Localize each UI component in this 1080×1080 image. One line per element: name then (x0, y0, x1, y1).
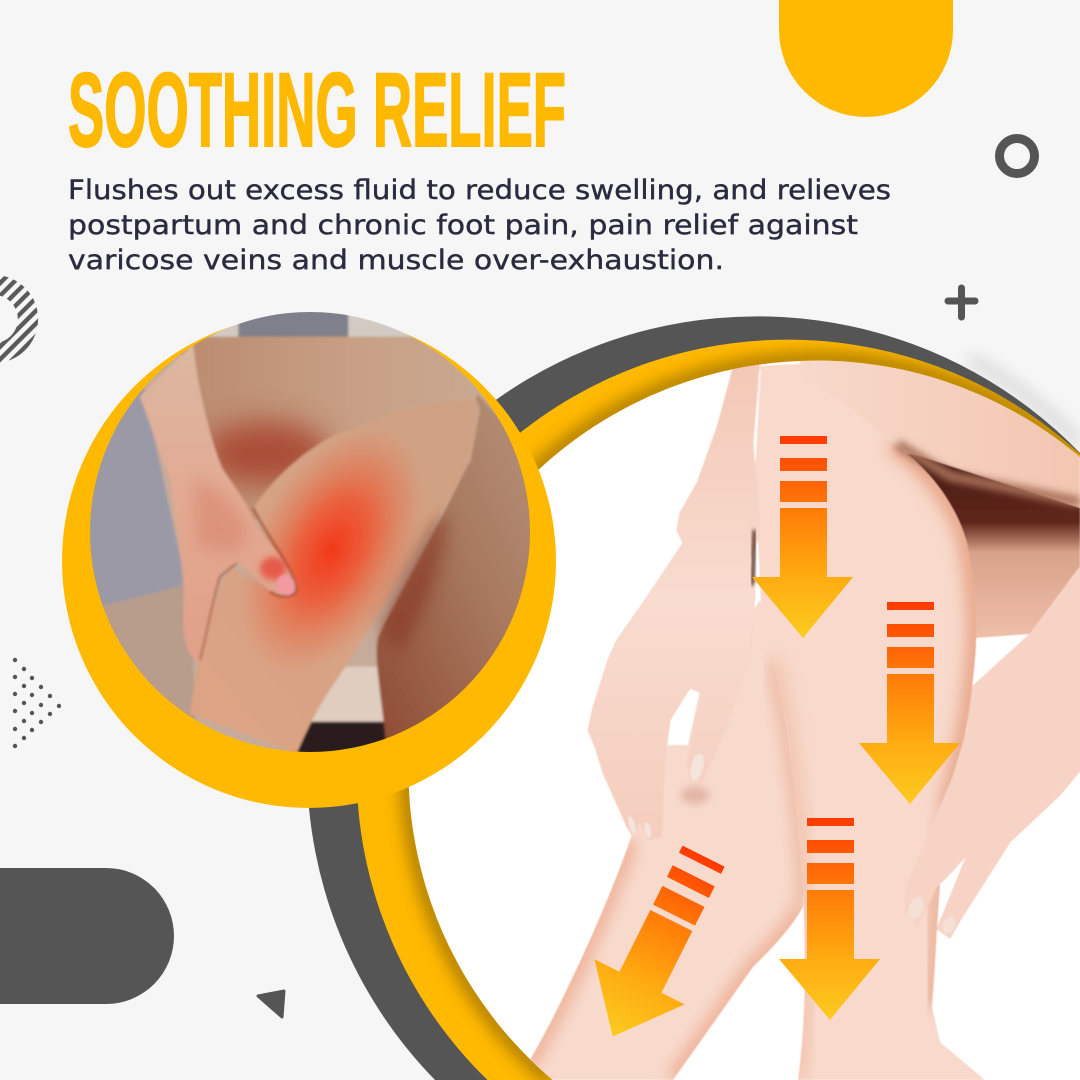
decoration: dot triangle (13, 658, 61, 748)
upper thigh (177, 337, 480, 520)
front calf (190, 398, 477, 753)
legs photo (527, 350, 1080, 1080)
main leg edge shading (773, 443, 976, 1080)
decoration: small triangle (258, 991, 284, 1017)
panel: calf pain photo circle (60, 293, 560, 808)
dark shade beside calf (380, 517, 447, 653)
black stool (294, 720, 388, 752)
arrow 4 (567, 833, 748, 1059)
thumb contour (253, 508, 297, 596)
gray towel (90, 388, 184, 607)
thumb nail (276, 573, 296, 597)
main leg (755, 360, 985, 1080)
back leg edge shading (527, 660, 803, 1080)
yellow backing circle (62, 314, 556, 808)
soft shadow beside ring (969, 358, 1080, 444)
decoration: gray pill (0, 868, 174, 1004)
decoration: gray ring (1000, 138, 1034, 174)
decoration: yellow top tab (779, 0, 953, 117)
back thigh with dark underside (900, 452, 1080, 638)
yellow ring inner shading (408, 361, 1080, 1080)
description text: Flushes out excess fluid to reduce swelling, and relieves (68, 175, 891, 206)
back leg (527, 600, 803, 1080)
description text: varicose veins and muscle over-exhaustion. (68, 245, 724, 276)
arrow 3 (779, 818, 880, 1020)
description text (68, 175, 891, 276)
hand lower edge shading (200, 563, 237, 660)
decoration: striped ring (0, 275, 38, 363)
yellow ring (357, 340, 1080, 1080)
description text: postpartum and chronic foot pain, pain relief against (68, 210, 858, 241)
photo (90, 312, 530, 752)
bottom light area (311, 666, 386, 724)
backdrop strip (207, 316, 413, 338)
thumb redness (260, 557, 287, 580)
rear lower leg (375, 394, 530, 739)
arrow 2 (859, 602, 960, 804)
gray ring (307, 316, 1080, 1080)
crossed thigh (800, 350, 1080, 508)
decoration: plus sign (948, 288, 975, 317)
left arm and hand (588, 360, 760, 840)
underside shade of thigh (897, 444, 1080, 502)
fingernails left hand (627, 752, 706, 838)
table lower left (103, 585, 195, 719)
fingernails right hand (908, 897, 956, 934)
white photo area (408, 361, 1080, 1080)
knuckle redness (193, 480, 250, 553)
panel: legs illustration circle (307, 316, 1080, 1080)
right arm and hand (928, 566, 1080, 939)
arrow 1 (752, 436, 853, 638)
highlight line between arm and leg (755, 370, 760, 460)
arm crease (752, 530, 755, 585)
crook redness (203, 422, 330, 485)
hand (140, 343, 297, 663)
title: SOOTHING RELIEF (68, 52, 566, 169)
red pain glow (248, 438, 416, 662)
